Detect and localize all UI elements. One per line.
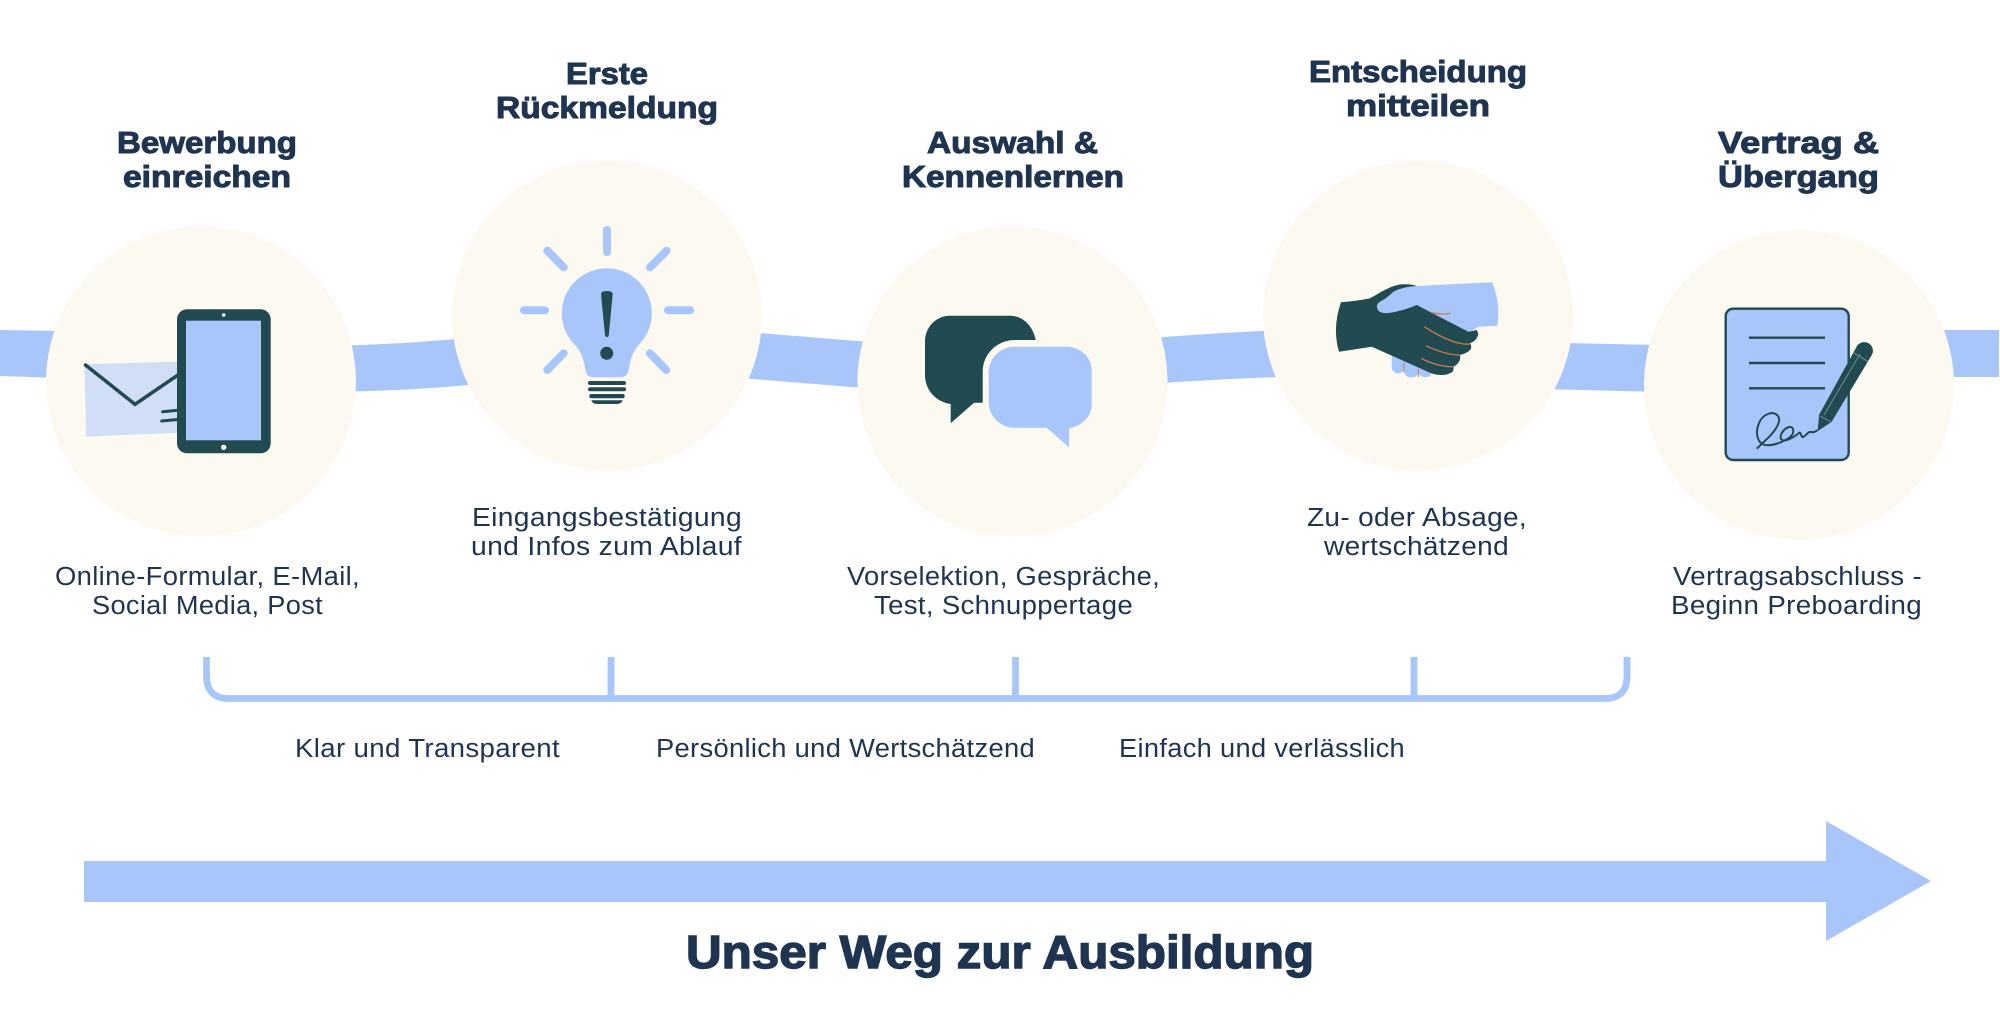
circle 3 <box>858 226 1168 536</box>
circle 2 <box>452 160 762 470</box>
title: Unser Weg zur Ausbildung <box>686 926 1314 978</box>
description 4: Zu- oder Absage, <box>1307 504 1527 532</box>
heading: Auswahl & Kennenlernen: Kennenlernen <box>902 159 1124 194</box>
step 1: Bewerbung einreichen <box>46 125 360 620</box>
circle 5 <box>1644 230 1954 540</box>
icon: light bulb <box>524 230 690 404</box>
description 4 <box>1307 504 1527 561</box>
wavy background band <box>0 330 1999 392</box>
description 3: Test, Schnuppertage <box>874 592 1133 620</box>
description 5 <box>1671 563 1922 620</box>
step 2: Erste Rückmeldung <box>452 56 762 561</box>
heading: Auswahl & Kennenlernen <box>902 125 1124 194</box>
step 3: Auswahl & Kennenlernen <box>847 125 1168 620</box>
label: Einfach und verlässlich: Einfach und verlässlich <box>1119 735 1405 763</box>
heading: Entscheidung mitteilen <box>1309 54 1527 123</box>
description 3 <box>847 563 1160 620</box>
icon: envelope and tablet <box>84 309 271 453</box>
icon: handshake <box>1336 282 1498 377</box>
heading: Vertrag & Übergang: Übergang <box>1718 159 1879 194</box>
heading: Bewerbung einreichen: Bewerbung <box>117 125 297 160</box>
heading: Erste Rückmeldung: Rückmeldung <box>496 90 718 125</box>
heading: Vertrag & Übergang: Vertrag & <box>1718 125 1879 160</box>
description 2: und Infos zum Ablauf <box>471 533 743 561</box>
circle 4 <box>1263 160 1573 470</box>
step 4: Entscheidung mitteilen <box>1263 54 1573 561</box>
heading: Vertrag & Übergang <box>1718 125 1879 194</box>
circle 1 <box>46 226 356 536</box>
description 2: Eingangsbestätigung <box>472 504 742 532</box>
label: Klar und Transparent: Klar und Transparent <box>295 735 560 763</box>
icon: speech bubbles <box>925 316 1092 447</box>
description 1: Social Media, Post <box>92 592 323 620</box>
arrow <box>84 821 1931 941</box>
icon: contract with pen <box>1726 309 1873 460</box>
description 5: Vertragsabschluss - <box>1673 563 1922 591</box>
heading: Entscheidung mitteilen: Entscheidung <box>1309 54 1527 89</box>
description 4: wertschätzend <box>1323 533 1509 561</box>
label: Persönlich und Wertschätzend: Persönlich und Wertschätzend <box>656 735 1035 763</box>
heading: Erste Rückmeldung: Erste <box>566 56 648 91</box>
heading: Bewerbung einreichen <box>117 125 297 194</box>
description 1 <box>55 563 360 620</box>
heading: Erste Rückmeldung <box>496 56 718 125</box>
description 3: Vorselektion, Gespräche, <box>847 563 1160 591</box>
description 2 <box>471 504 743 561</box>
step 5: Vertrag & Übergang <box>1644 125 1954 620</box>
description 5: Beginn Preboarding <box>1671 592 1922 620</box>
bracket timeline <box>206 657 1627 698</box>
heading: Bewerbung einreichen: einreichen <box>123 159 291 194</box>
heading: Auswahl & Kennenlernen: Auswahl & <box>927 125 1098 160</box>
description 1: Online-Formular, E-Mail, <box>55 563 360 591</box>
heading: Entscheidung mitteilen: mitteilen <box>1346 88 1490 123</box>
